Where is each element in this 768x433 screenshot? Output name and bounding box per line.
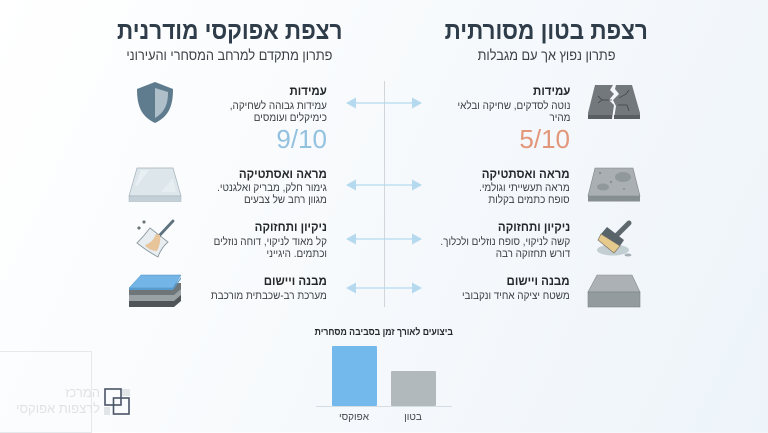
concrete structure text: משטח יציקה אחיד ונקבובי [462, 290, 570, 302]
logo watermark text [16, 385, 100, 416]
bar chart: performance over time [316, 346, 452, 423]
arrow: appearance comparison [346, 180, 422, 190]
icon: cracked concrete slab [588, 85, 640, 119]
epoxy durability text: עמידות גבוהה לשחיקה, [230, 100, 327, 112]
epoxy durability score: 9/10 [276, 124, 327, 154]
chart title: ביצועים לאורך זמן בסביבה מסחרית [315, 327, 453, 338]
icon: dirty paint brush [597, 220, 632, 256]
icon: stained concrete slab [588, 168, 640, 202]
epoxy structure text: מבנה ויישום [264, 274, 327, 288]
concrete appearance text [479, 167, 570, 206]
bar: concrete [391, 371, 436, 406]
epoxy cleaning text [214, 220, 327, 260]
center divider [384, 81, 385, 307]
arrow: durability comparison [346, 98, 422, 108]
heading: concrete floor: רצפת בטון מסורתית [445, 17, 648, 45]
label: concrete: בטון [404, 412, 422, 423]
subheading: concrete floor: פתרון נפוץ אך עם מגבלות [477, 47, 615, 63]
concrete cleaning text: קשה לניקוי, סופח נוזלים ולכלוך. [440, 236, 570, 248]
icon: glossy glass slab [128, 168, 182, 202]
logo watermark frame [0, 351, 92, 433]
epoxy appearance text: מראה ואסתטיקה [239, 167, 327, 181]
epoxy durability text: כימיקלים ועומסים [254, 112, 327, 124]
heading: epoxy floor: רצפת אפוקסי מודרנית [117, 17, 342, 45]
epoxy durability text [230, 84, 327, 124]
concrete structure text [462, 274, 570, 302]
concrete structure text: מבנה ויישום [507, 274, 570, 288]
icon: shield [137, 82, 173, 123]
epoxy appearance text: גימור חלק, מבריק ואלגנטי. [217, 182, 327, 194]
concrete durability text: מהיר [549, 112, 570, 124]
epoxy durability text: עמידות [290, 84, 327, 98]
icon: layered epoxy system [129, 274, 182, 307]
epoxy cleaning text: קל מאוד לניקוי, דוחה נוזלים [214, 236, 327, 248]
concrete cleaning text [440, 220, 570, 260]
bar: epoxy [332, 346, 377, 406]
concrete cleaning text: דורש תחזוקה רבה [495, 248, 570, 260]
logo icon [104, 388, 130, 415]
concrete durability text [457, 84, 570, 124]
epoxy structure text [211, 274, 327, 302]
icon: concrete block [588, 274, 640, 308]
epoxy appearance text: מגוון רחב של צבעים [244, 194, 327, 206]
epoxy cleaning text: ניקיון ותחזוקה [255, 220, 327, 234]
subheading: epoxy floor: פתרון מתקדם למרחב המסחרי והעירוני [126, 47, 332, 63]
epoxy structure text: מערכת רב-שכבתית מורכבת [211, 290, 327, 302]
concrete cleaning text: ניקיון ותחזוקה [498, 220, 570, 234]
concrete durability text: נוטה לסדקים, שחיקה ובלאי [457, 100, 570, 112]
epoxy appearance text [217, 167, 327, 206]
concrete appearance text: סופח כתמים בקלות [489, 194, 570, 206]
concrete appearance text: מראה ואסתטיקה [482, 167, 570, 181]
arrow: cleaning comparison [346, 234, 422, 244]
logo watermark text: המרכז [65, 385, 100, 400]
epoxy cleaning text: וכתמים. היגייני [267, 248, 327, 260]
concrete appearance text: מראה תעשייתי וגולמי. [479, 182, 570, 194]
icon: cleaning cloth and mop [136, 220, 174, 258]
label: epoxy: אפוקסי [339, 412, 370, 423]
concrete durability text: עמידות [533, 84, 570, 98]
arrow: structure comparison [346, 282, 422, 294]
logo watermark text: לרצפות אפוקסי [16, 401, 100, 416]
concrete durability score: 5/10 [519, 124, 570, 154]
